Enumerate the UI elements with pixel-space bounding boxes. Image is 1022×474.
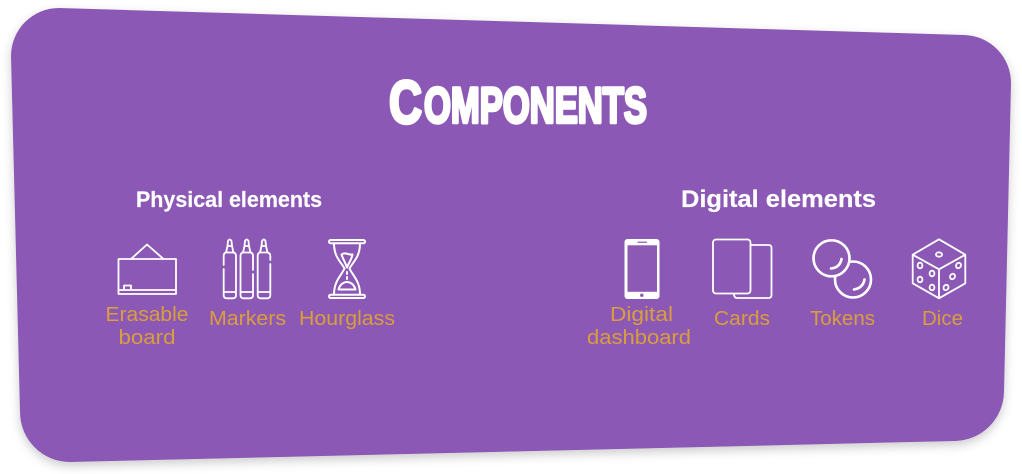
icon: tokens: [814, 240, 871, 298]
icon: dice: [913, 239, 965, 298]
icon: markers: [224, 240, 270, 298]
label: erasable board: board: [118, 327, 176, 349]
icon: erasable board: [118, 244, 176, 294]
label: digital dashboard: [587, 304, 691, 349]
title: OMPONENTS: [424, 78, 647, 134]
heading: digital elements: Digital elements: [681, 186, 876, 213]
label: hourglass: Hourglass: [299, 308, 395, 330]
label: digital dashboard: dashboard: [587, 327, 691, 349]
label: cards: Cards: [714, 308, 770, 330]
label: markers: Markers: [209, 308, 286, 330]
icon: digital dashboard phone: [624, 239, 660, 299]
heading: physical elements: Physical elements: [136, 187, 322, 212]
title: [389, 69, 647, 136]
icon: cards: [713, 240, 772, 298]
title: C: [389, 69, 422, 136]
label: dice: Dice: [922, 308, 963, 330]
icon: hourglass: [329, 240, 365, 298]
label: erasable board: [106, 304, 188, 349]
label: erasable board: Erasable: [106, 304, 188, 326]
label: digital dashboard: Digital: [610, 304, 673, 326]
label: tokens: Tokens: [810, 308, 875, 330]
